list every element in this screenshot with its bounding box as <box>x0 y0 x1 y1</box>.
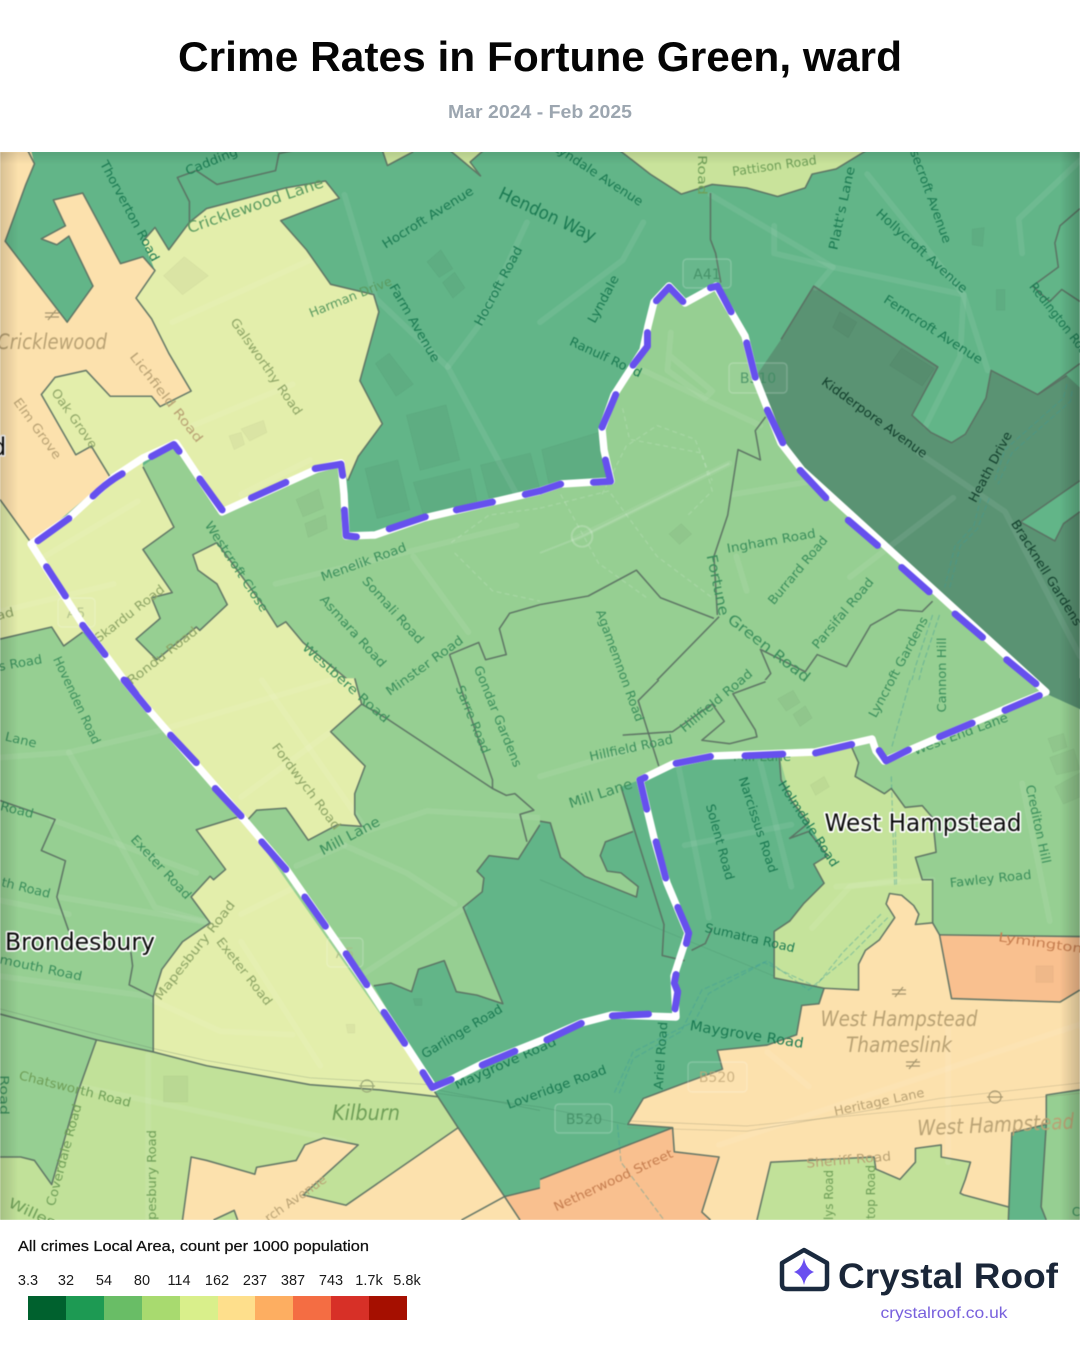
legend scale labels: 1.7k <box>355 1273 383 1289</box>
road labels: Farm Avenue <box>386 281 444 365</box>
road labels: Asmara Road <box>317 592 390 670</box>
road labels: Hovenden Road <box>50 654 104 746</box>
title: Crime Rates in Fortune Green, ward <box>178 33 902 80</box>
road labels: Coverdale Road <box>43 1102 84 1207</box>
road labels: Hollycroft Avenue <box>873 206 971 296</box>
road labels: Ariel Road <box>651 1021 670 1090</box>
place labels: Brondesbury <box>5 928 155 956</box>
ward boundary: Fortune Green <box>31 286 1046 1088</box>
road labels: Mapesbury Road <box>151 898 238 1003</box>
road labels: Minster Road <box>383 632 466 698</box>
legend scale labels: 387 <box>281 1273 305 1289</box>
road labels: Cadding <box>183 144 240 178</box>
road labels: Heath Drive <box>965 429 1015 505</box>
road labels: Exeter Road <box>213 934 276 1008</box>
road labels: Hocroft Avenue <box>379 183 476 251</box>
place labels <box>0 330 1075 1140</box>
brand name: Crystal Roof <box>838 1257 1058 1296</box>
road labels: Lichfield Road <box>127 349 206 445</box>
road labels: Parsifal Road <box>809 575 877 652</box>
legend scale labels: 80 <box>134 1273 150 1289</box>
road labels: Mill Lane <box>567 776 635 812</box>
road labels: Burrard Road <box>764 533 831 607</box>
road labels: Galsworthy Road <box>228 315 306 418</box>
road labels: Bracknell Gardens <box>1008 517 1080 628</box>
legend scale labels: 3.3 <box>18 1273 38 1289</box>
legend scale labels: 237 <box>243 1273 267 1289</box>
place labels: Kilburn <box>332 1101 400 1125</box>
road labels: Cricklewood Lane <box>185 173 326 237</box>
road labels: Lymington <box>997 929 1080 956</box>
road labels: Hendon Way <box>495 183 600 247</box>
road labels: Ingham Road <box>726 525 817 556</box>
road labels: Thorverton Road <box>97 157 163 264</box>
map area: south-west <box>0 678 540 1220</box>
map edge vignette <box>0 152 1080 1220</box>
road labels: Heritage Lane <box>833 1085 926 1118</box>
road labels: Green Road <box>724 612 813 686</box>
road labels: Elm Grove <box>10 395 65 462</box>
legend scale labels <box>18 1273 421 1289</box>
road labels: Mill Lane <box>733 749 791 764</box>
road labels: Mill Lane <box>317 814 383 859</box>
road labels: Ferncroft Avenue <box>881 292 986 367</box>
legend scale labels: 162 <box>205 1273 229 1289</box>
road labels: Garlinge Road <box>418 1001 505 1061</box>
road labels: Sarre Road <box>453 683 494 756</box>
road labels: Westcroft Close <box>202 518 272 615</box>
road number badges: B520 <box>699 1070 735 1086</box>
road labels: Gondar Gardens <box>471 663 525 769</box>
road labels: Lyndale Avenue <box>551 140 646 209</box>
legend colour bar <box>28 1296 407 1320</box>
legend title: All crimes Local Area, count per 1000 population <box>18 1239 369 1255</box>
road labels: Hocroft Road <box>471 244 525 328</box>
road labels: lys Road <box>821 1170 836 1220</box>
road labels: Lane <box>4 729 39 751</box>
road labels: C <box>1072 1205 1080 1219</box>
road labels: Maygrove Road <box>689 1018 805 1052</box>
place labels: Thameslink <box>846 1033 953 1057</box>
road labels: Westbere Road <box>299 640 393 726</box>
road labels: West End Lane <box>911 710 1010 758</box>
road labels: Solent Road <box>703 802 738 881</box>
road labels: pesbury Road <box>144 1130 159 1220</box>
road labels: Fortune <box>703 553 731 617</box>
road labels: Willes <box>6 1196 58 1231</box>
road labels: Maygrove Road <box>452 1034 558 1092</box>
map area: north-west <box>0 150 540 701</box>
road labels: Hillfield Road <box>677 666 755 735</box>
road labels: Crediton Hill <box>1023 783 1054 865</box>
road labels: Sumatra Road <box>704 920 797 955</box>
road labels: Menelik Road <box>319 539 408 584</box>
map area: north-east <box>540 150 1080 701</box>
road labels: rch Avenue <box>262 1171 329 1225</box>
road labels: Rosecroft Avenue <box>902 132 955 245</box>
road labels: Exeter Road <box>128 832 195 902</box>
legend scale labels: 114 <box>167 1273 191 1289</box>
road labels: Skardu Road <box>91 581 167 646</box>
road labels: Narcissus Road <box>736 775 781 874</box>
place labels: West Hampstead <box>820 1007 978 1031</box>
road labels: Chatsworth Road <box>17 1067 133 1110</box>
road labels: Hillfield Road <box>588 731 674 764</box>
place labels: Cricklewood <box>0 330 108 354</box>
road labels: Cannon Hill <box>934 638 949 712</box>
road labels: Kidderpore Avenue <box>819 374 931 461</box>
road labels: Lyndale <box>584 272 622 325</box>
road labels: mouth Road <box>0 952 84 984</box>
place labels: West Hampstead <box>824 809 1022 837</box>
road labels: Road <box>695 155 710 195</box>
road number badges: A41 <box>693 267 721 283</box>
map area: south-east <box>540 678 1080 1220</box>
station markers <box>45 310 1003 1103</box>
road number badges: A5 <box>336 946 354 962</box>
legend scale labels: 743 <box>319 1273 343 1289</box>
road labels: Oak Grove <box>48 385 101 452</box>
road number badges: A5 <box>67 606 85 622</box>
road labels: Lyncroft Gardens <box>865 614 931 720</box>
road labels: top Road <box>863 1165 878 1219</box>
subtitle: date range: Mar 2024 - Feb 2025 <box>448 102 632 122</box>
road number badges: B510 <box>740 371 776 387</box>
road labels: Loveridge Road <box>505 1062 608 1112</box>
road labels: Sheriff Road <box>806 1148 892 1171</box>
legend scale labels: 32 <box>58 1273 74 1289</box>
road labels: Platt's Lane <box>825 165 858 251</box>
brand url: crystalroof.co.uk <box>880 1305 1009 1322</box>
road number badges: B520 <box>566 1112 602 1128</box>
road labels: Rondu Road <box>124 623 200 688</box>
road labels: Somali Road <box>359 573 427 647</box>
road labels: Harman Drive <box>307 273 394 320</box>
road labels: Fordwych Road <box>269 740 344 833</box>
road labels: Pattison Road <box>731 152 818 179</box>
legend scale labels: 54 <box>96 1273 112 1289</box>
road number badges <box>58 259 787 1133</box>
road labels: th Road <box>0 874 52 901</box>
road labels: Netherwood Street <box>551 1146 675 1214</box>
icon: Crystal Roof house logo <box>782 1250 827 1289</box>
legend scale labels: 5.8k <box>393 1273 421 1289</box>
road labels: Agamemnon Road <box>593 607 647 723</box>
road labels: Ranulf Road <box>567 334 644 380</box>
road labels: Fawley Road <box>949 867 1032 890</box>
road labels: Holmdale Road <box>775 778 842 870</box>
